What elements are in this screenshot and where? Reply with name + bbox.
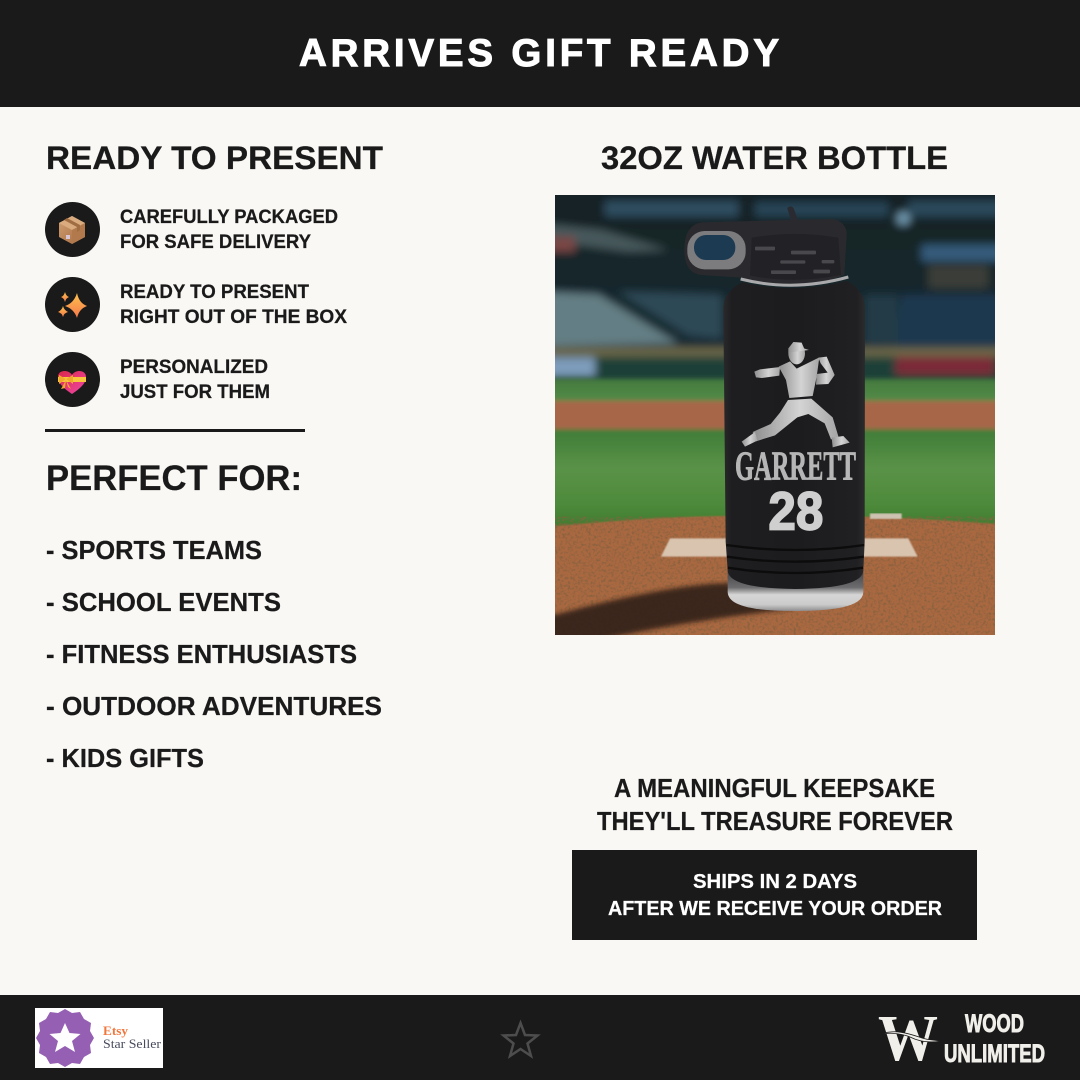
- benefit text: [120, 356, 270, 403]
- list: perfect for items: - KIDS GIFTS: [46, 743, 204, 773]
- tagline: [597, 775, 953, 836]
- heading: product name: 32OZ WATER BOTTLE: [601, 140, 948, 176]
- benefit: personalized: [45, 352, 270, 407]
- product photo: engraved water bottle on pitcher's mound: [542, 182, 1008, 642]
- stadium background: [555, 195, 995, 380]
- list: perfect for items: - OUTDOOR ADVENTURES: [46, 691, 382, 721]
- icon: package box: [59, 216, 85, 244]
- bottle shadow: [548, 583, 795, 642]
- footer bar: [0, 995, 1080, 1080]
- header banner: [0, 0, 1080, 107]
- benefit text: [120, 206, 338, 253]
- engraved player silhouette: [742, 342, 850, 447]
- tagline: A MEANINGFUL KEEPSAKE: [614, 775, 935, 803]
- benefit text: FOR SAFE DELIVERY: [120, 231, 311, 253]
- title: ARRIVES GIFT READY: [299, 32, 779, 75]
- icon: sparkles: [58, 292, 87, 318]
- callout: shipping time: [572, 850, 977, 940]
- list: perfect for items: - FITNESS ENTHUSIASTS: [46, 639, 357, 669]
- benefit: carefully packaged: [45, 202, 338, 257]
- logo: Wood Unlimited: W: [878, 1002, 938, 1075]
- bottle lid: [684, 206, 847, 285]
- outfield grass and dirt: [542, 379, 1008, 529]
- heading: ready to present: READY TO PRESENT: [46, 140, 383, 176]
- heading: perfect for: PERFECT FOR:: [46, 459, 302, 498]
- callout: shipping time: AFTER WE RECEIVE YOUR ORDER: [608, 897, 942, 920]
- logo: Wood Unlimited: WOOD: [965, 1010, 1024, 1038]
- list: perfect for items: [46, 535, 382, 773]
- benefit text: RIGHT OUT OF THE BOX: [120, 306, 347, 328]
- benefit text: [120, 281, 347, 328]
- tagline: THEY'LL TREASURE FOREVER: [597, 808, 953, 836]
- badge: Etsy Star Seller: [35, 1008, 163, 1068]
- benefit text: PERSONALIZED: [120, 356, 268, 378]
- logo: Wood Unlimited: UNLIMITED: [944, 1040, 1045, 1068]
- benefit text: CAREFULLY PACKAGED: [120, 206, 338, 228]
- pitcher's mound: [548, 513, 1002, 642]
- badge: Etsy Star Seller: Etsy: [103, 1023, 129, 1038]
- badge: Etsy Star Seller: Star Seller: [103, 1037, 162, 1051]
- callout: shipping time: SHIPS IN 2 DAYS: [693, 870, 857, 893]
- icon: heart with ribbon: [58, 371, 86, 394]
- benefit text: READY TO PRESENT: [120, 281, 309, 303]
- engraved number: 28: [768, 482, 823, 542]
- benefit text: JUST FOR THEM: [120, 381, 270, 403]
- engraved name: GARRETT: [735, 442, 856, 488]
- list: perfect for items: - SCHOOL EVENTS: [46, 587, 281, 617]
- bottom metal base: [728, 568, 863, 611]
- icon: star outline: [504, 1023, 538, 1056]
- logo: Wood Unlimited: [878, 1002, 1045, 1075]
- bottle body: [723, 281, 865, 589]
- list: perfect for items: - SPORTS TEAMS: [46, 535, 262, 565]
- water bottle: [684, 206, 865, 611]
- bottle neck ring: [741, 277, 848, 285]
- pitching rubber: [661, 538, 918, 557]
- base ridges: [726, 545, 864, 573]
- benefit: ready to present: [45, 277, 347, 332]
